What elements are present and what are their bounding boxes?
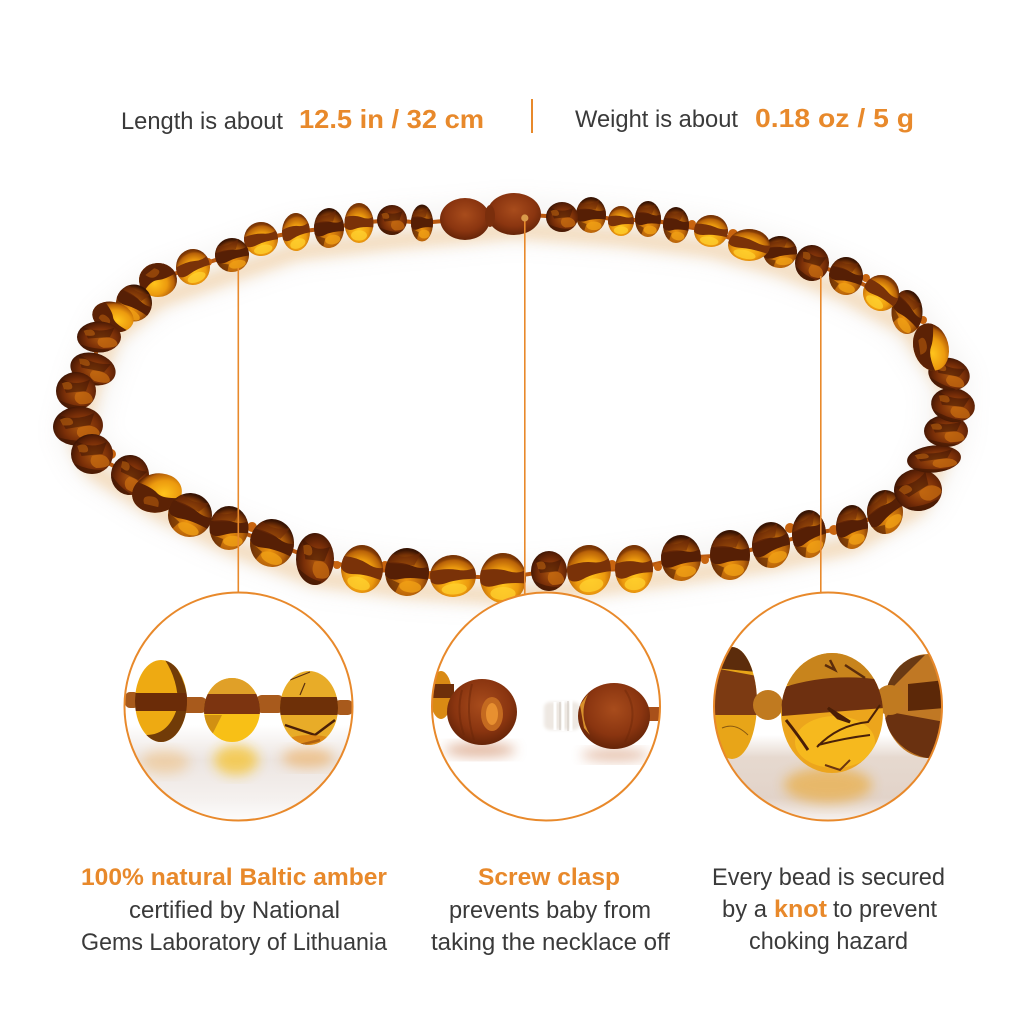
- small bead: [433, 671, 454, 719]
- bead 3: [278, 671, 340, 745]
- caption: knot: [712, 864, 945, 955]
- left clasp bead: [447, 679, 517, 745]
- connector line: knot: [820, 276, 822, 593]
- connector line: amber: [238, 268, 239, 593]
- clasp beads: [440, 193, 541, 240]
- caption: Baltic amber: certified by National: [129, 897, 340, 924]
- right clasp bead: [578, 683, 650, 749]
- length measurement: Length is about: [121, 108, 283, 135]
- connector line: clasp: [521, 214, 528, 594]
- amber beads: [51, 197, 978, 603]
- caption: knot: Every bead is secured: [712, 864, 945, 891]
- centre bead: [780, 650, 884, 773]
- caption: knot: by a: [722, 896, 768, 923]
- cord knots: [125, 692, 353, 715]
- floor: [728, 739, 928, 820]
- floor: [130, 734, 348, 812]
- right bead: [884, 654, 941, 758]
- bead 1: [135, 660, 187, 742]
- circle: knot close-up: [713, 592, 943, 822]
- caption: knot: choking hazard: [749, 928, 908, 955]
- knots: [753, 685, 905, 720]
- caption: screw clasp: [431, 864, 670, 956]
- length measurement: 12.5 in / 32 cm: [299, 104, 484, 134]
- weight measurement: [575, 103, 914, 133]
- caption: screw clasp: prevents baby from: [449, 897, 651, 924]
- necklace shadow and glow: [78, 220, 949, 596]
- circle: screw clasp close-up: [430, 592, 660, 820]
- screw thread: [544, 700, 580, 731]
- weight measurement: 0.18 oz / 5 g: [755, 103, 914, 133]
- caption: screw clasp: taking the necklace off: [431, 929, 670, 956]
- weight measurement: Weight is about: [575, 106, 738, 133]
- circle: amber beads close-up: [124, 592, 354, 825]
- cord: [76, 214, 953, 578]
- cord end: [648, 707, 659, 721]
- knots: [106, 220, 927, 579]
- length measurement: [121, 104, 484, 135]
- caption: knot: knot: [774, 896, 827, 923]
- caption: Baltic amber: [81, 864, 388, 956]
- bead 2: [204, 678, 260, 742]
- caption: Baltic amber: 100% natural Baltic amber: [81, 864, 387, 891]
- caption: Baltic amber: Gems Laboratory of Lithuania: [81, 929, 388, 956]
- caption: knot: to prevent: [833, 896, 937, 923]
- necklace: [51, 193, 978, 603]
- left bead: [715, 647, 757, 759]
- caption: screw clasp: Screw clasp: [478, 864, 620, 891]
